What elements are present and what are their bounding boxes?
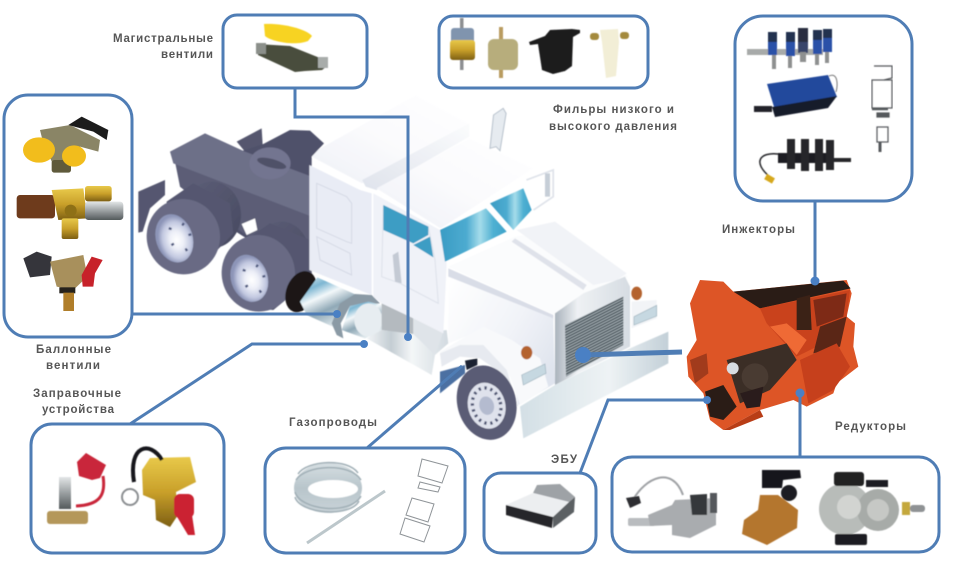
windshield bbox=[440, 188, 532, 262]
icon: white filter bbox=[590, 29, 629, 78]
label: cylinder valves: вентили bbox=[46, 360, 100, 372]
cab side, tank and step bbox=[279, 165, 532, 375]
roof and exhaust bbox=[309, 95, 553, 228]
label: ECU: ЭБУ bbox=[551, 454, 578, 466]
icon: brass filling valve bbox=[122, 448, 196, 535]
arrow: grille to engine bbox=[575, 347, 682, 363]
panel: cylinder valves bbox=[4, 95, 132, 337]
label: main valves bbox=[113, 33, 213, 61]
icon: quick coupling with red cap bbox=[47, 453, 106, 524]
hood bbox=[448, 222, 628, 405]
label: filters: Фильры низкого и bbox=[553, 104, 674, 116]
bumper bbox=[520, 332, 668, 438]
connector: gas pipes bbox=[367, 366, 462, 448]
fender bbox=[440, 327, 548, 407]
label: main valves: Магистральные bbox=[113, 33, 213, 45]
panel: ECU bbox=[484, 473, 596, 553]
panel: reducers bbox=[612, 457, 939, 552]
icon: yellow handle valve bbox=[256, 24, 328, 72]
label: injectors: Инжекторы bbox=[722, 224, 795, 236]
panel: filters bbox=[439, 16, 648, 88]
rear wheel two bbox=[217, 222, 310, 316]
connector: reducers bbox=[796, 388, 804, 457]
step and skirt bbox=[367, 303, 448, 375]
icon: fitting schematic bbox=[400, 459, 448, 542]
right headlights bbox=[631, 287, 657, 328]
rear chassis and wheels bbox=[138, 128, 324, 316]
connector: main valves bbox=[295, 88, 412, 341]
gap behind wheels bbox=[242, 218, 257, 235]
label: gas pipes: Газопроводы bbox=[289, 417, 377, 429]
panel: injectors bbox=[735, 16, 912, 201]
icon: coiled pipe bbox=[294, 463, 362, 513]
label: cylinder valves: Баллонные bbox=[36, 344, 111, 356]
icon: grey reducer with cable bbox=[626, 477, 717, 538]
label: filters bbox=[549, 104, 677, 133]
label: filling devices: устройства bbox=[42, 404, 115, 416]
label: filling devices bbox=[33, 388, 121, 416]
engine details bbox=[690, 290, 850, 430]
hood, grille and front wheel bbox=[440, 222, 668, 447]
rear wheel one bbox=[142, 182, 241, 279]
label: reducers: Редукторы bbox=[835, 421, 906, 433]
panel: main valves bbox=[223, 15, 367, 88]
panel: gas pipes bbox=[265, 448, 465, 553]
sleeper side bbox=[309, 165, 372, 295]
icon: blue injector rail bbox=[747, 28, 832, 69]
cab door bbox=[373, 193, 447, 333]
mudflap bbox=[440, 365, 465, 393]
icon: brass and chrome valve bbox=[17, 186, 123, 239]
front wheel bbox=[449, 359, 525, 447]
chassis block bbox=[170, 133, 312, 277]
connector: ECU bbox=[580, 396, 711, 473]
panel: filling devices bbox=[31, 424, 224, 553]
label: main valves: вентили bbox=[161, 49, 213, 61]
connector: cylinder valves bbox=[132, 310, 341, 318]
icon: straight pipe bbox=[307, 491, 385, 543]
connector: filling devices bbox=[130, 340, 368, 424]
truck illustration bbox=[138, 95, 668, 447]
icon: silver reducer bbox=[819, 472, 925, 545]
left mudguard bbox=[138, 180, 165, 233]
radiator grille bbox=[555, 277, 630, 385]
engine block bbox=[687, 280, 858, 430]
label: filling devices: Заправочные bbox=[33, 388, 121, 400]
valve cover bbox=[733, 281, 851, 308]
icon: black injector rail bbox=[760, 139, 851, 184]
icon: injector schematic bbox=[872, 66, 892, 152]
icon: yellow twin valve bbox=[23, 117, 108, 173]
connector: injectors bbox=[810, 201, 820, 286]
icon: blue injector block bbox=[754, 75, 837, 117]
fuel tank bbox=[279, 266, 382, 338]
far fender and tyre bbox=[180, 128, 324, 280]
icon: black filter bbox=[529, 29, 580, 74]
icon: red handle valve bbox=[23, 252, 103, 311]
label: cylinder valves bbox=[36, 344, 111, 372]
engine bbox=[687, 280, 858, 430]
icon: control unit bbox=[506, 484, 575, 528]
icon: metal filter two bbox=[488, 27, 518, 78]
label: filters: высокого давления bbox=[549, 121, 677, 133]
icon: metal filter one bbox=[450, 18, 475, 70]
icon: brass reducer bbox=[742, 470, 801, 545]
